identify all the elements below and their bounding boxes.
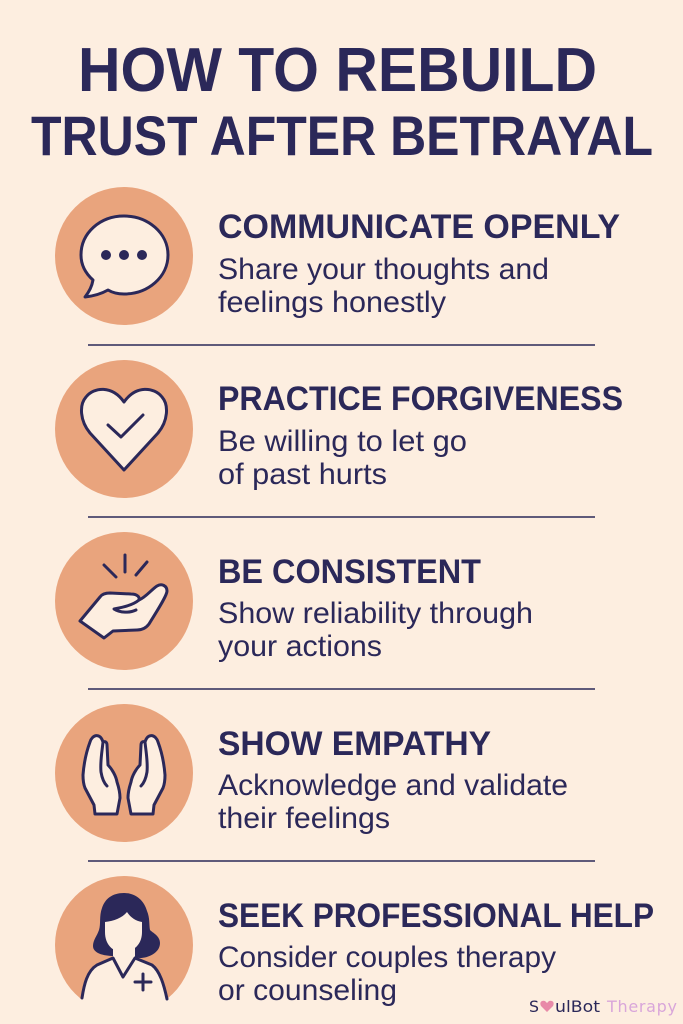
heading: communicate openly: COMMUNICATE OPENLY	[218, 208, 620, 246]
heading: be consistent: BE CONSISTENT	[218, 553, 481, 591]
panel: be consistent	[55, 532, 533, 670]
icon: therapist	[55, 876, 193, 1020]
panel: practice forgiveness	[55, 360, 623, 498]
text: communicate openly description: feelings honestly	[218, 286, 446, 319]
text: practice forgiveness description	[218, 425, 467, 491]
text: be consistent description	[218, 597, 533, 663]
text: show empathy description: Acknowledge and validate	[218, 769, 568, 802]
text: practice forgiveness description: of past hurts	[218, 458, 387, 491]
heading: seek professional help: SEEK PROFESSIONAL HELP	[218, 897, 654, 935]
text: seek professional help description	[218, 941, 556, 1007]
icon: heart with check	[55, 360, 193, 498]
logo: SoulBot Therapy: S	[529, 997, 539, 1016]
text: show empathy description: their feelings	[218, 802, 390, 835]
title: HOW TO REBUILD	[78, 36, 597, 105]
panel: communicate openly	[55, 187, 620, 325]
text: seek professional help description: or counseling	[218, 974, 397, 1007]
logo: SoulBot Therapy	[529, 997, 677, 1016]
icon: open hand with sparkle	[55, 532, 193, 670]
text: be consistent description: your actions	[218, 630, 382, 663]
text: seek professional help description: Consider couples therapy	[218, 941, 556, 974]
panel: seek professional help	[55, 876, 654, 1020]
title	[31, 36, 653, 167]
panel: show empathy	[55, 704, 568, 842]
icon: raised open hands	[55, 704, 193, 842]
text: communicate openly description: Share your thoughts and	[218, 253, 549, 286]
text: be consistent description: Show reliability through	[218, 597, 533, 630]
icon: speech bubble	[55, 187, 193, 325]
heading: show empathy: SHOW EMPATHY	[218, 725, 491, 763]
heading: practice forgiveness: PRACTICE FORGIVENESS	[218, 380, 623, 418]
logo: SoulBot Therapy: Therapy	[606, 997, 677, 1016]
text: communicate openly description	[218, 253, 549, 319]
text: show empathy description	[218, 769, 568, 835]
text: practice forgiveness description: Be willing to let go	[218, 425, 467, 458]
logo: SoulBot Therapy: ulBot	[555, 997, 600, 1016]
